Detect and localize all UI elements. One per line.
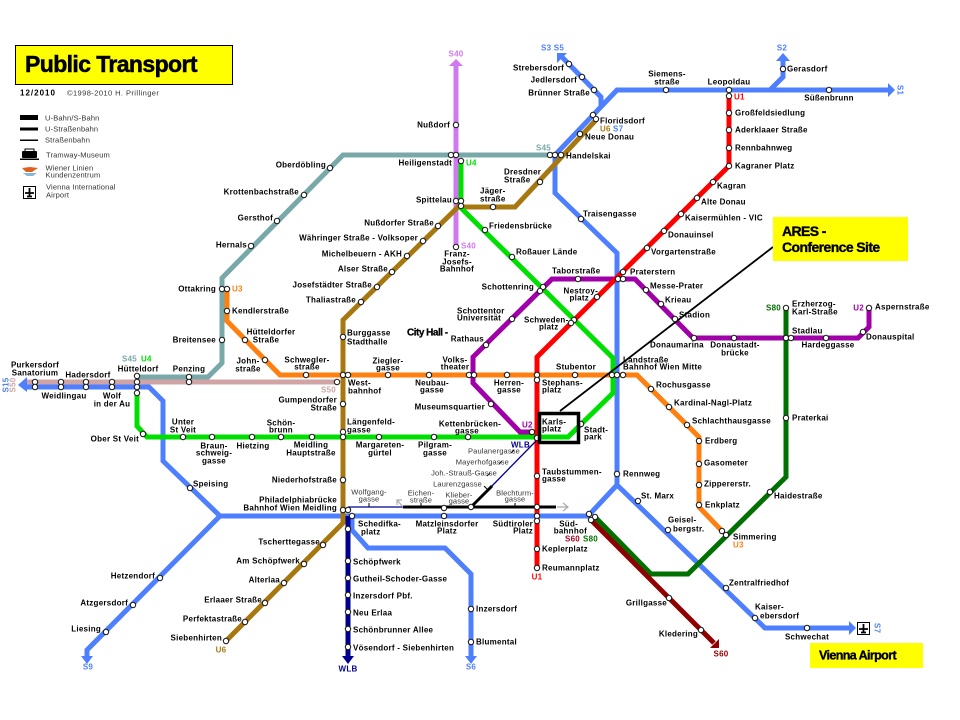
- station labels centre: platz: [542, 424, 561, 434]
- station labels west and south: Unter: [172, 418, 194, 426]
- station labels west and south: Am Schöpfwerk: [236, 556, 300, 566]
- station labels centre: Schweden-: [524, 316, 569, 324]
- station labels west and south: Blumental: [476, 638, 517, 646]
- station labels centre: U2: [522, 420, 533, 430]
- station labels west and south: Purkersdorf: [11, 360, 59, 370]
- station labels north: Straße: [504, 176, 531, 184]
- station labels centre: ebersdorf: [760, 612, 799, 620]
- station labels centre: Rennweg: [623, 470, 660, 478]
- callout: City Hall: City Hall -: [407, 328, 448, 338]
- tram stop labels: Klieber-: [445, 490, 473, 500]
- station labels west and south: Sanatorium: [12, 368, 58, 378]
- station labels north: Brünner Straße: [528, 88, 590, 98]
- station labels centre: Schlachthausgasse: [692, 416, 771, 426]
- station labels west and south: S9: [83, 662, 93, 672]
- station labels north: Dresdner: [504, 168, 541, 176]
- station labels centre: S80: [583, 534, 598, 544]
- station labels north: Gerasdorf: [787, 64, 828, 74]
- station labels centre: brücke: [721, 348, 749, 358]
- station labels centre: bahnhof: [554, 526, 587, 536]
- station labels west and south: Inzersdorf: [476, 604, 517, 614]
- callout: Vienna Airport: Vienna Airport: [819, 648, 897, 662]
- station labels north: Traisengasse: [583, 210, 637, 218]
- station labels centre: Reumannplatz: [542, 564, 600, 572]
- station labels centre: Erzherzog-: [792, 300, 836, 308]
- station labels west and south: St Veit: [170, 426, 196, 434]
- line: U2 purple: [473, 279, 869, 432]
- legend: Kundenzentrum: [22, 164, 100, 180]
- station labels west and south: Liesing: [71, 624, 101, 634]
- station labels centre: Donaustadt-: [710, 340, 760, 350]
- station labels centre: S60: [714, 650, 729, 658]
- station labels north: Oberdöbling: [276, 160, 326, 170]
- station labels west and south: S6: [466, 662, 476, 672]
- station labels centre: Schottenring: [482, 282, 534, 292]
- line: U4 green: [137, 161, 613, 437]
- station labels west and south: Hauptstraße: [286, 448, 336, 458]
- station labels centre: Messe-Prater: [650, 282, 703, 290]
- station labels west and south: U6: [216, 646, 227, 654]
- station labels north: Michelbeuern - AKH: [322, 250, 402, 258]
- station labels west and south: Penzing: [173, 364, 205, 374]
- station labels centre: platz: [361, 528, 380, 536]
- station labels centre: Philadelphiabrücke: [259, 496, 337, 504]
- station labels centre: [173, 266, 930, 658]
- station labels north: Josefstädter Straße: [293, 280, 372, 290]
- station labels north: Siemens-: [648, 70, 686, 78]
- station labels centre: Bahnhof Wien Meidling: [243, 504, 337, 512]
- line: U1 red: [537, 96, 729, 568]
- station labels north: Friedensbrücke: [489, 222, 552, 230]
- legend: U-Bahn/S-Bahn: U-Bahn/S-Bahn: [45, 114, 99, 122]
- station labels centre: platz: [539, 322, 558, 332]
- tram stop labels: gasse: [505, 494, 525, 504]
- station labels west and south: Vösendorf - Siebenhirten: [353, 644, 454, 652]
- line: S80 dark green: [595, 308, 786, 574]
- station labels west and south: Schöpfwerk: [353, 558, 401, 566]
- icon: airport: [858, 622, 882, 634]
- station labels centre: St. Marx: [641, 492, 674, 500]
- station labels west and south: WLB: [339, 664, 357, 674]
- station labels centre: Donaumarina: [650, 340, 704, 350]
- station labels north: Jäger-: [480, 186, 506, 196]
- station labels west and south: Erlaaer Straße: [204, 596, 262, 604]
- station labels centre: Rathaus: [451, 334, 484, 344]
- station labels north: Praterstern: [630, 268, 675, 276]
- station labels west and south: Neu Erlaa: [353, 608, 392, 618]
- station labels north: Aderklaaer Straße: [735, 126, 808, 134]
- callout: ARES conference site: ARES -: [782, 223, 827, 239]
- station labels centre: Niederhofstraße: [272, 476, 337, 484]
- station labels west and south: S15: [2, 377, 10, 392]
- station labels north: S7: [613, 124, 624, 134]
- legend: Vienna International Airport: [24, 182, 116, 200]
- tram stop labels: [351, 446, 534, 506]
- station labels centre: platz: [570, 294, 589, 302]
- station labels centre: gasse: [542, 474, 566, 484]
- station labels centre: Matzleinsdorfer: [416, 520, 478, 528]
- station labels west and south: Weidlingau: [41, 392, 87, 400]
- station labels north: Heiligenstadt: [399, 158, 452, 168]
- station labels centre: Nestroy-: [564, 286, 598, 296]
- station labels centre: Margareten-: [356, 440, 404, 450]
- station labels centre: Hardeggasse: [802, 340, 855, 350]
- station labels north: S2: [777, 44, 787, 52]
- station labels north: Strebersdorf: [513, 64, 564, 72]
- station labels north: Kagran: [717, 182, 746, 190]
- station labels centre: Simmering: [733, 532, 777, 542]
- station labels north: Alser Straße: [338, 264, 388, 274]
- station labels centre: Bahnhof Wien Mitte: [623, 362, 702, 372]
- station labels west and south: Hadersdorf: [65, 370, 111, 380]
- callout: Vienna Airport: [810, 643, 923, 668]
- station labels centre: Gasometer: [704, 458, 748, 468]
- station labels north: Rennbahnweg: [735, 144, 792, 152]
- station labels centre: Keplerplatz: [542, 544, 588, 554]
- copyright: ©1998-2010 H. Prillinger: [67, 88, 159, 98]
- station labels north: Spittelau: [416, 196, 452, 204]
- station labels centre: Herren-: [494, 378, 524, 388]
- station labels west and south: [2, 354, 517, 674]
- station labels centre: Museumsquartier: [415, 402, 485, 412]
- station labels north: S40: [449, 50, 464, 58]
- station labels centre: Stephans-: [542, 378, 583, 388]
- station labels centre: Südtiroler: [493, 520, 533, 528]
- station labels centre: gasse: [376, 364, 400, 372]
- station labels west and south: Hetzendorf: [111, 572, 155, 580]
- station labels centre: Ziegler-: [373, 356, 404, 366]
- station labels centre: Kledering: [659, 630, 698, 638]
- station labels centre: Rochusgasse: [656, 380, 711, 390]
- station labels north: Kagraner Platz: [735, 162, 795, 170]
- tram stop labels: Laurenzgasse: [433, 480, 482, 488]
- station labels north: U1: [734, 92, 745, 102]
- station labels centre: Praterkai: [792, 414, 828, 422]
- station labels north: Donauinsel: [668, 230, 714, 240]
- station labels north: Kaisermühlen - VIC: [685, 214, 763, 222]
- station labels centre: Schwechat: [785, 632, 829, 642]
- station labels north: Handelskai: [566, 152, 611, 160]
- line: S60 dark red: [591, 520, 719, 648]
- station labels north: Franz-: [444, 250, 470, 258]
- station labels centre: Kaiser-: [755, 602, 784, 612]
- legend: Tramway-Museum: Tramway-Museum: [46, 150, 110, 160]
- legend: U-Straßenbahn: U-Straßenbahn: [45, 124, 98, 134]
- station labels centre: gasse: [497, 386, 521, 394]
- legend: Vienna International Airport: Vienna International: [46, 182, 116, 192]
- station labels centre: straße: [235, 364, 261, 374]
- station labels centre: Platz: [513, 526, 533, 536]
- station labels west and south: Ober St Veit: [91, 434, 139, 444]
- station labels north: Neue Donau: [585, 132, 634, 142]
- station labels north: S40: [461, 242, 476, 250]
- station labels north: Josefs-: [442, 258, 472, 266]
- station labels west and south: S50: [8, 377, 18, 392]
- station labels north: U6: [600, 124, 611, 134]
- station labels centre: U2: [853, 304, 864, 312]
- station labels north: S1: [896, 85, 904, 95]
- station labels centre: Straße: [311, 404, 337, 412]
- station labels west and south: Hietzing: [236, 442, 270, 450]
- station labels west and south: Alterlaa: [249, 576, 280, 584]
- title box: [16, 46, 232, 84]
- station labels centre: Stadt-: [584, 426, 608, 434]
- station labels centre: Süd-: [559, 520, 578, 528]
- station labels centre: Breitensee: [173, 336, 216, 344]
- legend: Straßenbahn: Straßenbahn: [45, 136, 90, 144]
- station labels west and south: U4: [141, 354, 152, 364]
- station labels west and south: Meidling: [294, 440, 328, 450]
- station labels centre: Landstraße: [623, 356, 669, 364]
- station labels centre: Straße: [253, 336, 279, 344]
- station labels centre: Zippererstr.: [704, 480, 751, 488]
- station labels north: Krottenbachstraße: [224, 188, 299, 196]
- station labels centre: Gumpendorfer: [278, 396, 337, 404]
- tram stop labels: Blechturm-: [496, 488, 534, 498]
- line: WLB thin connection and tram: [348, 441, 568, 511]
- tram stop labels: gasse: [359, 494, 379, 504]
- station labels centre: John-: [236, 356, 260, 366]
- station labels north: Alte Donau: [701, 198, 746, 206]
- icon: airport: S7: [872, 623, 882, 633]
- station labels north: Nußdorf: [417, 120, 450, 130]
- station labels west and south: S45: [122, 354, 137, 364]
- station labels west and south: Hütteldorf: [118, 364, 158, 374]
- station labels centre: gasse: [347, 426, 371, 434]
- station labels north: Jedlersdorf: [531, 76, 577, 84]
- station labels north: straße: [480, 194, 506, 204]
- tram stop labels: Paulanergasse: [468, 446, 520, 456]
- station labels centre: S50: [321, 386, 336, 394]
- line: S40 violet: [449, 59, 463, 247]
- station labels north: U4: [466, 158, 477, 168]
- station labels north: Vorgartenstraße: [651, 248, 716, 256]
- tram stop labels: straße: [410, 496, 432, 504]
- station labels centre: Krieau: [665, 296, 691, 304]
- station labels west and south: Wolf: [103, 392, 121, 400]
- station labels centre: Geisel-: [668, 516, 697, 524]
- station labels centre: Haidestraße: [774, 492, 823, 500]
- line: U3 orange: [227, 289, 722, 531]
- station labels centre: Universität: [457, 314, 501, 322]
- station labels centre: Stadlau: [792, 326, 823, 336]
- station labels centre: Taborstraße: [552, 266, 601, 276]
- station labels west and south: schweig-: [196, 448, 232, 458]
- transit network lines: [18, 53, 895, 664]
- title box: Public Transport: [25, 51, 198, 77]
- station labels west and south: Atzgersdorf: [80, 598, 128, 608]
- station labels centre: gürtel: [368, 448, 392, 458]
- station labels north: Gersthof: [238, 214, 273, 222]
- station labels centre: WLB: [511, 440, 530, 450]
- station labels centre: Kettenbrücken-: [439, 420, 501, 428]
- station labels centre: bahnhof: [348, 386, 381, 396]
- station labels centre: Kardinal-Nagl-Platz: [674, 398, 752, 408]
- station labels centre: Kendlerstraße: [232, 306, 289, 316]
- station labels west and south: Tscherttegasse: [258, 538, 320, 546]
- station labels north: Hernals: [216, 240, 247, 250]
- station labels centre: S80: [766, 304, 781, 312]
- callout: ARES conference site: Conference Site: [782, 239, 880, 255]
- station labels west and south: Gutheil-Schoder-Gasse: [353, 574, 447, 584]
- station labels centre: Schwegler-: [284, 356, 330, 364]
- station labels centre: Aspernstraße: [875, 302, 930, 312]
- station labels north: straße: [654, 78, 680, 86]
- station labels centre: U3: [232, 284, 243, 294]
- station labels centre: West-: [348, 378, 371, 388]
- station labels centre: Pilgram-: [418, 440, 452, 450]
- station labels north: Leopoldau: [708, 78, 750, 86]
- station labels north: Süßenbrunn: [804, 94, 854, 102]
- station labels west and south: brunn: [269, 426, 293, 434]
- tram stop labels: gasse: [449, 496, 469, 506]
- station labels centre: Stadion: [679, 310, 710, 320]
- station labels centre: Grillgasse: [626, 598, 667, 608]
- station labels north: Bahnhof: [440, 264, 474, 274]
- legend: [20, 88, 159, 200]
- station labels centre: Stadthalle: [347, 338, 388, 346]
- station labels west and south: Schön-: [267, 418, 295, 428]
- station labels centre: Volks-: [443, 356, 468, 364]
- station labels centre: Erdberg: [705, 436, 737, 446]
- station labels north: Floridsdorf: [600, 116, 645, 126]
- line: U6 brown: [226, 120, 596, 641]
- station labels centre: Donauspital: [866, 332, 915, 342]
- station labels centre: U3: [733, 540, 744, 550]
- callout: ARES conference site: [773, 217, 908, 261]
- station labels north: S3 S5: [541, 44, 564, 52]
- station labels west and south: gasse: [202, 456, 226, 466]
- station labels centre: Längenfeld-: [347, 418, 395, 426]
- pointer line to conference site: [560, 247, 773, 411]
- station labels centre: platz: [542, 386, 561, 394]
- station labels centre: Schottentor: [457, 306, 505, 316]
- station labels centre: Schedifka-: [358, 520, 401, 528]
- line: S50 pink: [24, 380, 337, 384]
- station labels centre: Enkplatz: [705, 500, 740, 510]
- station labels centre: S60: [565, 534, 580, 544]
- station labels west and south: Schönbrunner Allee: [353, 626, 434, 634]
- legend: Kundenzentrum: Kundenzentrum: [46, 170, 100, 180]
- station labels centre: gasse: [420, 386, 444, 394]
- station labels west and south: Perfektastraße: [183, 614, 242, 624]
- station labels centre: Platz: [437, 526, 457, 536]
- station labels centre: Karls-: [542, 418, 566, 426]
- tram stop labels: Joh.-Strauß-Gasse: [431, 468, 497, 478]
- station labels north: S45: [536, 144, 551, 152]
- station labels north: Roßauer Lände: [516, 248, 578, 256]
- station labels centre: Ottakring: [178, 284, 216, 294]
- station labels centre: Karl-Straße: [792, 308, 838, 316]
- station labels centre: U1: [532, 572, 543, 582]
- station labels west and south: in der Au: [94, 400, 130, 408]
- station labels west and south: Inzersdorf Pbf.: [353, 592, 413, 600]
- date: 12/2010: [20, 88, 56, 98]
- station labels centre: gasse: [455, 426, 479, 436]
- station labels centre: bergstr.: [673, 524, 704, 534]
- station markers: [32, 61, 872, 650]
- station labels north: Währinger Straße - Volksoper: [299, 234, 418, 242]
- station labels north: [216, 44, 904, 304]
- station labels centre: theater: [441, 362, 469, 372]
- station labels centre: Taubstummen-: [542, 468, 602, 476]
- station labels centre: Zentralfriedhof: [729, 578, 789, 588]
- station labels north: Großfeldsiedlung: [735, 108, 805, 118]
- station labels centre: gasse: [423, 448, 447, 458]
- line: WLB navy: [342, 516, 354, 664]
- station labels west and south: Braun-: [200, 442, 228, 450]
- station labels north: Thaliastraße: [306, 296, 356, 304]
- station labels west and south: Speising: [193, 480, 228, 488]
- station labels centre: Stubentor: [556, 362, 596, 372]
- tram stop labels: Eichen-: [408, 488, 435, 498]
- station labels centre: straße: [294, 362, 320, 372]
- station labels centre: Neubau-: [415, 378, 449, 388]
- station labels centre: Burggasse: [347, 328, 391, 338]
- station labels north: Nußdorfer Straße: [364, 218, 434, 228]
- legend: Kundenzentrum: Wiener Linien: [46, 164, 93, 172]
- tram stop labels: Wolfgang-: [351, 488, 387, 496]
- line: S45 teal: [137, 155, 555, 377]
- station labels centre: Hütteldorfer: [247, 328, 295, 336]
- line: S-Bahn blue network: [18, 53, 895, 664]
- station labels centre: park: [584, 432, 602, 442]
- legend: Vienna International Airport: Airport: [46, 190, 70, 200]
- station labels west and south: Siebenhirten: [171, 634, 222, 642]
- marker: Karlsplatz box: [540, 414, 578, 442]
- tram stop labels: Mayerhofgasse: [456, 458, 509, 466]
